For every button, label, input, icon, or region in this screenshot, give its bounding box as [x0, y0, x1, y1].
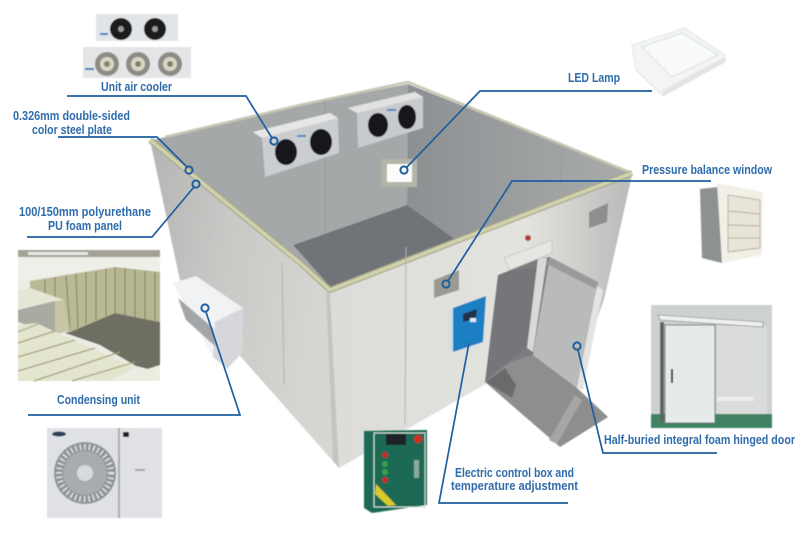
callout: color steel plate: color steel plate — [32, 123, 112, 137]
front outer wall — [330, 175, 632, 468]
three-fan cooler — [83, 47, 191, 78]
callout: electric control box: temperature adjustment — [451, 479, 579, 493]
callout: unit air cooler — [67, 80, 278, 145]
callout: condensing unit: Condensing unit — [57, 393, 141, 407]
front wall shadow corner — [326, 290, 339, 468]
callout: PU foam panel: 100/150mm polyurethane — [19, 205, 151, 219]
unit air cooler right — [348, 92, 423, 148]
callout: hinged door — [573, 342, 795, 453]
callout: color steel plate — [13, 109, 193, 174]
callout: LED lamp — [400, 71, 652, 174]
callout: pressure balance window: Pressure balance window — [642, 163, 772, 177]
foam block left — [18, 288, 64, 310]
door floor ramp — [485, 355, 608, 447]
callout: unit air cooler: Unit air cooler — [101, 80, 172, 94]
foam wall right — [115, 267, 160, 322]
door frame strip — [527, 258, 547, 352]
unit air cooler photos — [83, 14, 191, 78]
back-right inner wall — [407, 84, 632, 242]
hinged door — [533, 257, 598, 388]
callout: PU foam panel — [19, 180, 200, 237]
LED lamp photo — [632, 28, 725, 96]
electric control box photo — [364, 430, 427, 513]
wall panel seams — [282, 100, 562, 425]
callout: pressure balance window — [442, 163, 772, 288]
back-left inner wall — [153, 84, 408, 290]
two-fan cooler — [96, 14, 178, 41]
foam slabs — [18, 323, 135, 381]
pressure balance window photo — [700, 183, 763, 263]
door opening — [485, 257, 577, 388]
callout: condensing unit — [28, 304, 240, 415]
foam wall left — [30, 267, 115, 333]
LED wall light — [381, 159, 417, 187]
left outer wall — [150, 140, 339, 468]
right wall vent — [589, 203, 608, 228]
condensing unit on wall — [173, 276, 243, 369]
unit air cooler left — [253, 113, 339, 177]
callout: electric control box — [439, 343, 579, 503]
control panel — [449, 296, 486, 352]
panel floor — [65, 313, 160, 372]
callout: LED lamp: LED Lamp — [568, 71, 620, 85]
pressure plate — [434, 270, 459, 298]
top rim — [150, 82, 632, 290]
sliding door photo — [651, 305, 772, 428]
interior floor — [293, 205, 456, 290]
callout: PU foam panel: PU foam panel — [48, 219, 122, 233]
door header — [504, 240, 552, 270]
callout: electric control box: Electric control box and — [455, 466, 574, 480]
cold room — [150, 82, 632, 468]
red alarm — [525, 235, 531, 241]
condensing unit photo — [47, 428, 162, 518]
callout: color steel plate: 0.326mm double-sided — [13, 109, 130, 123]
polyurethane panel photo — [18, 250, 160, 381]
